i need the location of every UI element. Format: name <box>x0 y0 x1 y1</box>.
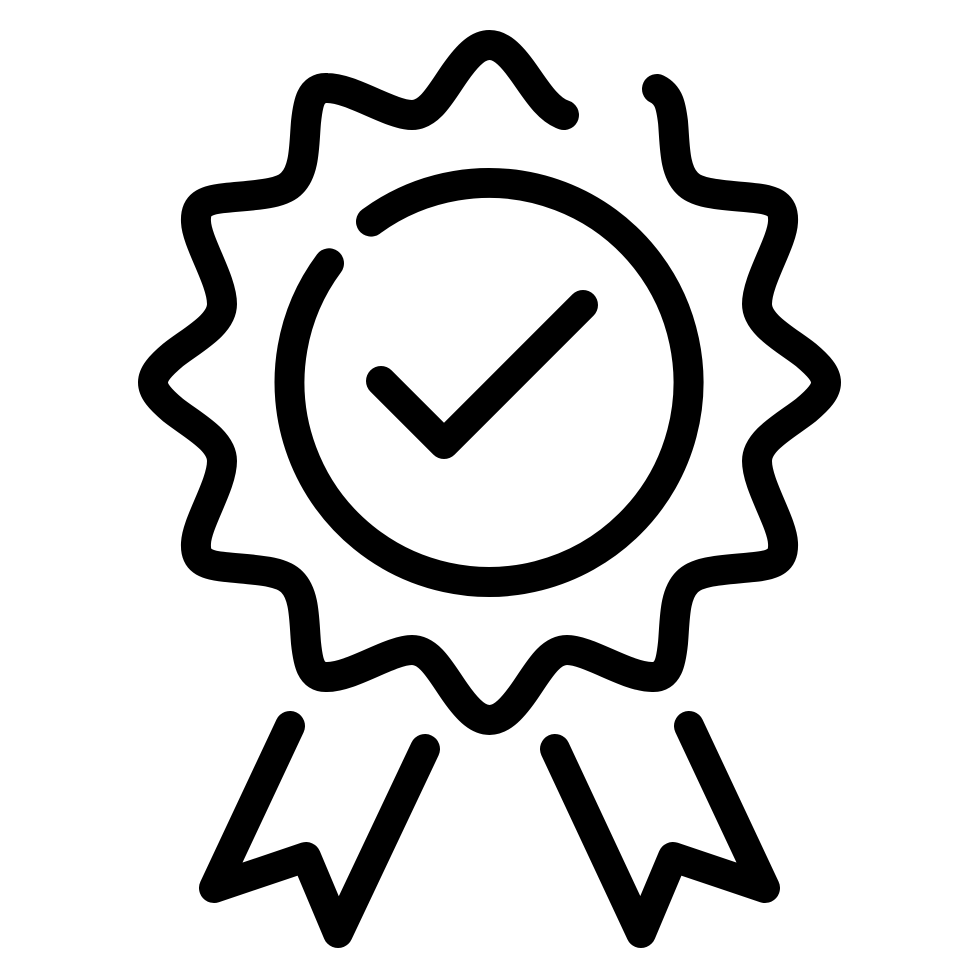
icon: right ribbon <box>555 726 765 933</box>
icon: left ribbon <box>214 726 425 933</box>
icon: scalloped badge outline <box>153 45 826 720</box>
icon: check mark <box>381 305 583 444</box>
icon: inner circle ring <box>290 183 689 582</box>
